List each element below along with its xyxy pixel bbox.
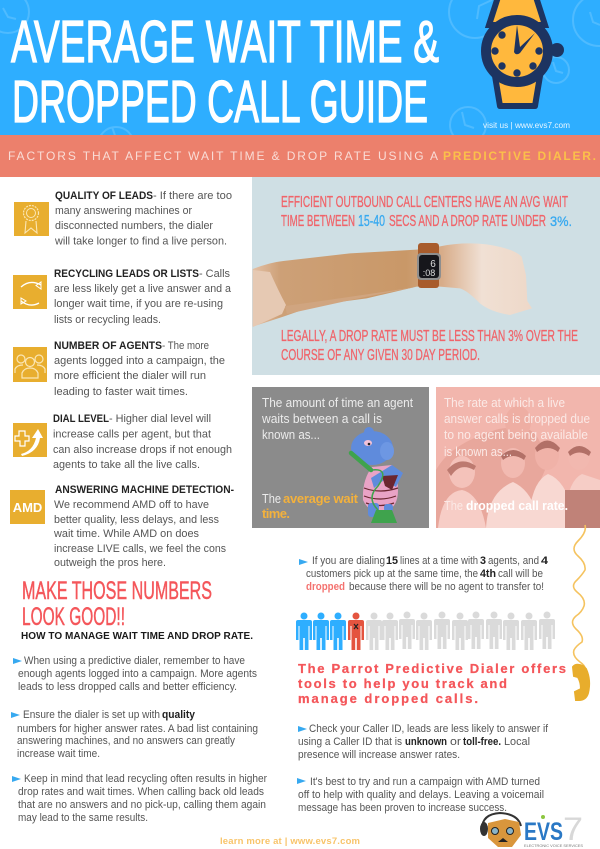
callout: parrot predictive dialer: manage dropped calls. xyxy=(298,691,478,706)
tip: dialing example: If you are dialing xyxy=(312,555,385,567)
tip: caller ID: using a Caller ID that is xyxy=(298,736,402,748)
factor: number of agents: - The more xyxy=(162,340,209,352)
photo: arm with smartwatch xyxy=(253,243,532,327)
icon: AMD badge xyxy=(10,490,45,524)
factor: answering machine detection: outweigh the pros here. xyxy=(54,557,166,569)
tip: dialing example: call will be xyxy=(498,568,543,580)
factor: dial level: - Higher dial level will xyxy=(109,413,211,425)
tip: dialing example: 15 xyxy=(386,555,398,567)
tip: dialing example: 4 xyxy=(541,555,549,567)
tip: lead recycling: Keep in mind that lead recycling often results in higher xyxy=(24,773,267,785)
icon: phone with curly cord xyxy=(572,525,589,700)
tip: dialing example: 3 xyxy=(480,555,486,567)
text: benchmark statement: 15-40 xyxy=(358,213,385,230)
factor: number of agents xyxy=(13,340,225,398)
icon: recycle arrows xyxy=(13,275,47,309)
illustration: hippo on the phone xyxy=(351,427,403,523)
callout: parrot predictive dialer: The Parrot Predictive Dialer offers xyxy=(298,661,566,676)
logo: EVS7 cheetah: 7 xyxy=(563,811,583,847)
icon: wrist watch xyxy=(486,0,564,106)
factor: number of agents: more efficient the dialer will run xyxy=(54,370,206,382)
panel: arm and watch benchmark xyxy=(252,177,600,375)
tip: enough agents: enough agents logged into a campaign. More agents xyxy=(18,668,257,680)
tip: quality numbers: Ensure the dialer is set up with xyxy=(23,709,160,721)
factor: quality of leads: will take longer to find a live person. xyxy=(54,236,227,248)
text: wait time definition: waits between a call is xyxy=(261,411,382,426)
factor: quality of leads: - If there are too xyxy=(153,190,232,202)
tip: caller ID: Local xyxy=(504,736,530,748)
text: benchmark statement: 3%. xyxy=(550,213,572,229)
text: drop rate definition: dropped call rate. xyxy=(466,498,568,513)
factor: dial level: DIAL LEVEL xyxy=(53,413,109,425)
tip: quality numbers xyxy=(11,709,258,760)
tip: dialing example: customers pick up at the same time, the xyxy=(306,568,478,580)
icon: plus and up arrow xyxy=(13,423,47,457)
tip: lead recycling: that are no answers and no pick-up, calling them again xyxy=(18,799,266,811)
factor: answering machine detection: We recommend AMD off to have xyxy=(54,499,209,511)
text: benchmark statement: TIME BETWEEN xyxy=(281,213,355,230)
text: wait time definition: time. xyxy=(262,506,290,521)
tip: caller ID: toll-free. xyxy=(463,736,501,748)
callout: parrot predictive dialer xyxy=(298,661,566,706)
factor: answering machine detection: ANSWERING MACHINE DETECTION- xyxy=(55,484,234,496)
text: wait time definition xyxy=(261,395,413,521)
factor: answering machine detection: better quality, less delays, and less xyxy=(54,514,219,526)
callout: parrot predictive dialer: tools to help you track and xyxy=(298,676,507,691)
factors banner xyxy=(0,135,600,177)
factor: number of agents: NUMBER OF AGENTS xyxy=(54,340,162,352)
factors banner: PREDICTIVE DIALER. xyxy=(443,149,596,163)
logo: EVS7 cheetah xyxy=(480,811,583,848)
panel: average wait time xyxy=(252,387,429,528)
factor: recycling leads: RECYCLING LEADS OR LISTS xyxy=(54,268,199,280)
title xyxy=(11,9,439,135)
heading: make those numbers look good xyxy=(22,577,212,631)
tip: dialing example: lines at a time with xyxy=(400,555,478,567)
pictogram: 15 lines with 3 agents xyxy=(296,612,555,650)
factor: dial level: increase calls per agent, but that xyxy=(53,428,211,440)
visit us link: visit us | www.evs7.com xyxy=(483,121,570,130)
text: legal limit: COURSE OF ANY GIVEN 30 DAY PERIOD. xyxy=(281,347,480,364)
factor: answering machine detection: increase LIVE calls, we feel the cons xyxy=(54,543,226,555)
tip: dialing example: because there will be no agent to transfer to! xyxy=(349,581,544,593)
text: wait time definition: The amount of time an agent xyxy=(262,395,413,410)
tip: dialing example: agents, and xyxy=(488,555,539,567)
tip: enough agents: When using a predictive dialer, remember to have xyxy=(24,655,245,667)
tip: quality numbers: increase wait time. xyxy=(17,748,100,760)
tip: quality numbers: answering machines, and no answers can greatly xyxy=(17,735,235,747)
tip: AMD off: off to help with quality and delays. Leaving a voicemail xyxy=(298,789,544,801)
logo: EVS7 cheetah: EVS xyxy=(524,818,563,846)
subheading: how to manage: HOW TO MANAGE WAIT TIME AND DROP RATE. xyxy=(21,631,253,642)
logo: EVS7 cheetah: ELECTRONIC VOICE SERVICES xyxy=(524,843,583,848)
factor: recycling leads: longer wait time, if you are re-using xyxy=(54,298,223,310)
factor: recycling leads xyxy=(13,268,232,326)
tip: lead recycling: drop rates and wait times. When calling back old leads xyxy=(18,786,264,798)
factor: quality of leads: many answering machines or xyxy=(55,205,192,217)
factor: answering machine detection: wait time. While AMD on does xyxy=(53,528,199,540)
text: drop rate definition: to no agent being available xyxy=(444,427,588,442)
icon: group of people xyxy=(13,347,47,382)
text: wait time definition: average wait xyxy=(283,491,359,506)
tip: caller ID: Check your Caller ID, leads are less likely to answer if xyxy=(309,723,549,735)
photo: call center agents xyxy=(436,406,600,528)
icon: award ribbon xyxy=(14,202,49,236)
factor: quality of leads: QUALITY OF LEADS xyxy=(55,190,153,202)
tip: dialing example: 4th xyxy=(480,568,496,580)
tip: lead recycling: may lead to the same results. xyxy=(18,812,148,824)
tip: caller ID: presence will increase answer rates. xyxy=(298,749,460,761)
tip: enough agents: leads to less dropped calls and better efficiency. xyxy=(18,681,237,693)
footer link: learn more at | www.evs7.com xyxy=(220,836,360,847)
tip: dialing example: dropped xyxy=(306,581,345,593)
factor: number of agents: agents logged into a campaign, the xyxy=(54,355,225,367)
factor: recycling leads: - Calls xyxy=(199,268,230,280)
factors banner: FACTORS THAT AFFECT WAIT TIME & DROP RATE USING A xyxy=(8,149,438,163)
text: drop rate definition xyxy=(444,395,590,513)
factor: recycling leads: are less likely get a live answer and a xyxy=(54,283,232,295)
factor: dial level: agents to take all the live calls. xyxy=(53,459,200,471)
factor: quality of leads: disconnected numbers, the dialer xyxy=(55,220,213,232)
tip: quality numbers: numbers for higher answer rates. A bad list containing xyxy=(17,723,258,735)
factor: dial level: can also increase drops if not enough xyxy=(53,444,232,456)
tip: dialing example xyxy=(299,555,549,593)
tip: quality numbers: quality xyxy=(162,709,196,721)
factor: recycling leads: lists or recycling leads. xyxy=(54,314,161,326)
tip: AMD off: It's best to try and run a campaign with AMD turned xyxy=(310,776,540,788)
factor: number of agents: leading to faster wait times. xyxy=(54,386,188,398)
factor: dial level xyxy=(13,413,232,471)
factor: answering machine detection xyxy=(10,484,234,569)
tip: AMD off: message has been proven to increase success. xyxy=(298,802,507,814)
text: drop rate definition: The rate at which a live xyxy=(444,395,565,410)
tip: AMD off xyxy=(297,776,544,814)
header banner xyxy=(0,0,600,163)
text: drop rate definition: is known as... xyxy=(444,444,512,459)
text: legal limit xyxy=(281,328,578,364)
text: drop rate definition: The xyxy=(444,498,463,513)
text: benchmark statement xyxy=(281,194,572,230)
photo: arm with smartwatch: :08 xyxy=(423,268,435,278)
tip: caller ID: unknown xyxy=(405,736,447,748)
tip: caller ID: or xyxy=(450,736,461,748)
tip: lead recycling xyxy=(12,773,267,824)
text: wait time definition: known as... xyxy=(262,427,320,442)
factor: quality of leads xyxy=(14,190,232,248)
heading: make those numbers look good: LOOK GOOD!! xyxy=(22,603,125,631)
icon: AMD badge: AMD xyxy=(13,500,42,515)
text: wait time definition: The xyxy=(262,491,281,506)
photo: arm with smartwatch: 6 xyxy=(430,259,436,270)
tip: enough agents xyxy=(13,655,257,693)
panel: dropped call rate xyxy=(436,387,600,528)
tip: caller ID xyxy=(298,723,549,761)
heading: make those numbers look good: MAKE THOSE NUMBERS xyxy=(22,577,212,605)
